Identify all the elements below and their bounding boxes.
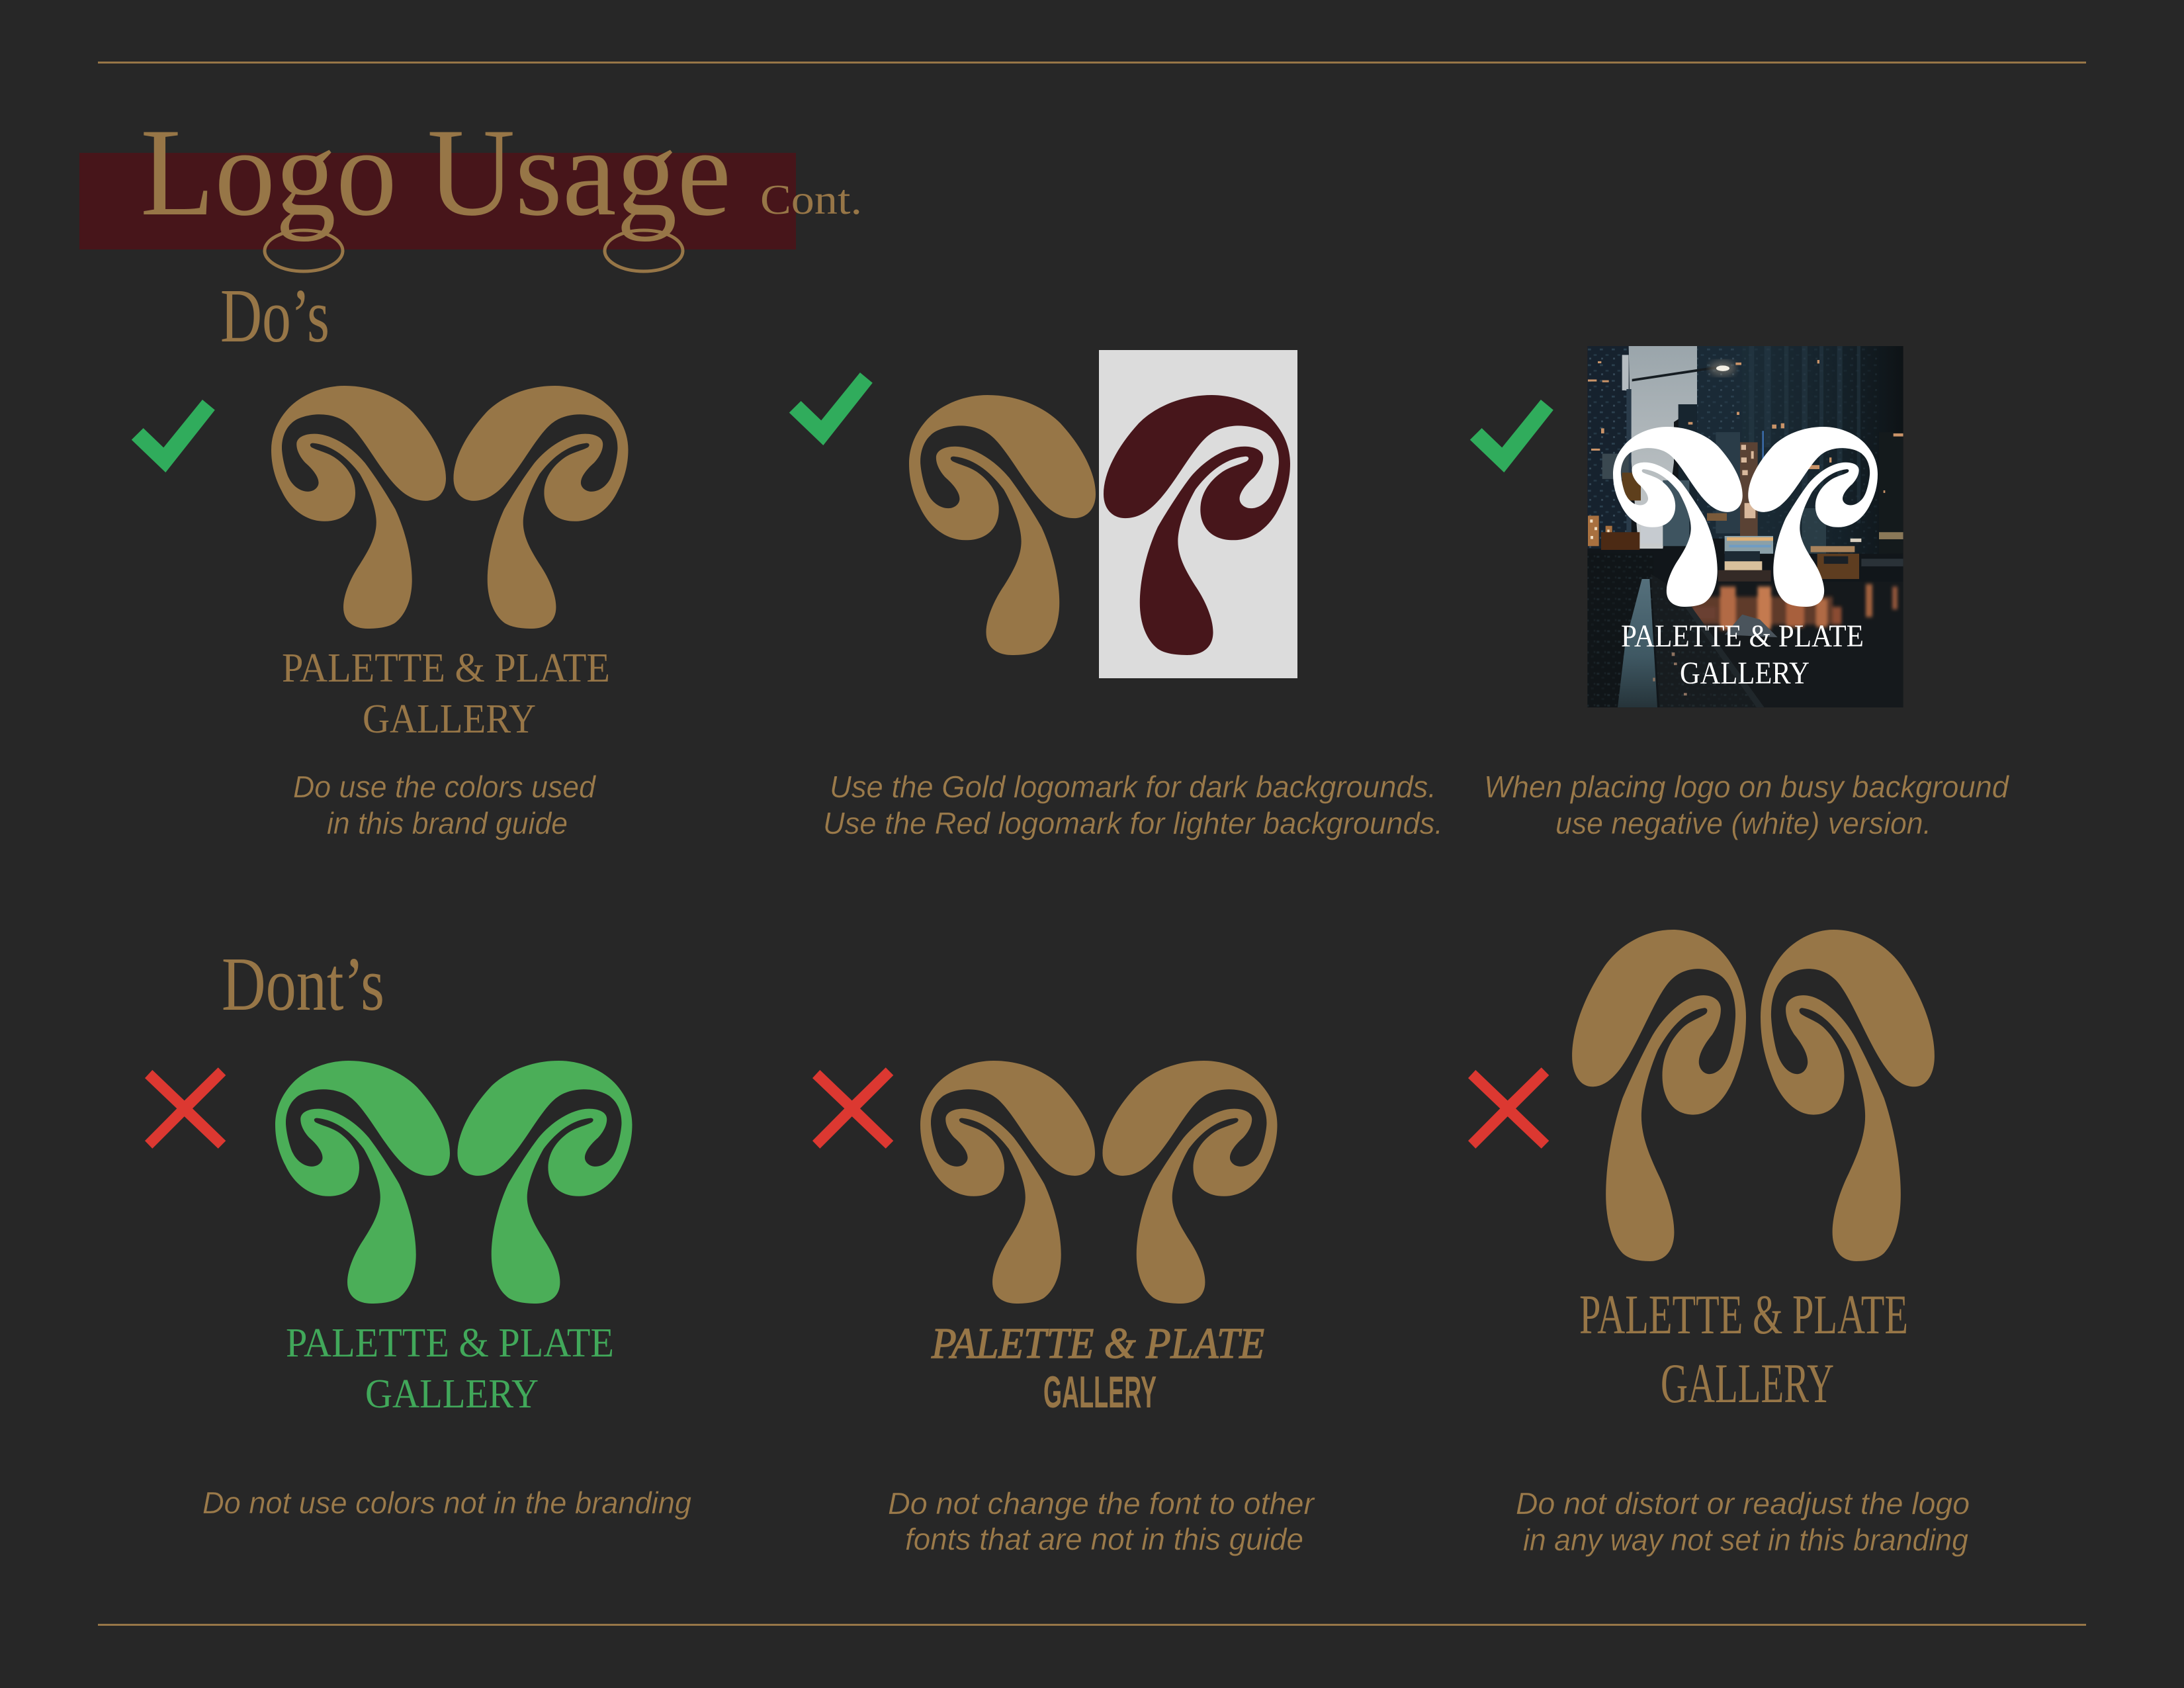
left side lights: [1588, 515, 1612, 546]
central car and traffic: [1725, 536, 1773, 554]
caption: in any way not set in this branding: [1523, 1523, 1968, 1557]
distorted wordmark: [1579, 1284, 1908, 1415]
caption: Do use the colors used: [293, 770, 596, 804]
wordmark green: GALLERY: [365, 1372, 539, 1417]
light grey swatch: [1099, 350, 1297, 678]
caption: fonts that are not in this guide: [905, 1522, 1303, 1556]
caption: [293, 770, 596, 840]
caption: [1484, 770, 2009, 840]
red half logomark: [1104, 395, 1290, 655]
panel: negative logo on busy background: [1470, 346, 2009, 840]
caption: When placing logo on busy background: [1484, 770, 2009, 804]
logomark green: [275, 1061, 632, 1304]
icon: check mark: [789, 373, 873, 445]
caption: [888, 1486, 1315, 1556]
city street photo: [1587, 346, 1903, 707]
wordmark: [282, 646, 610, 742]
wordmark green: PALETTE & PLATE: [286, 1321, 614, 1366]
panel: gold and red logomarks: [789, 350, 1443, 840]
wordmark green: [286, 1321, 614, 1417]
white logomark: [1613, 427, 1878, 607]
taxi on the right: [1817, 554, 1859, 579]
heading: Dont's: Dont’s: [222, 942, 384, 1026]
gold half logomark: [909, 395, 1096, 655]
distorted wordmark: PALETTE & PLATE: [1579, 1284, 1908, 1346]
panel: do not use off-brand colors: [145, 1061, 691, 1520]
wet sidewalk: [1618, 579, 1657, 707]
central lit tower: [1740, 442, 1758, 539]
icon: red cross: [145, 1067, 226, 1149]
lower road tone: [1685, 582, 1903, 707]
logomark gold: [920, 1061, 1277, 1304]
title highlight band: [79, 153, 796, 249]
top rule: [98, 62, 2086, 64]
wordmark: PALETTE & PLATE: [282, 646, 610, 691]
caption: Do not distort or readjust the logo: [1516, 1486, 1970, 1521]
caption: Do not change the font to other: [888, 1486, 1315, 1521]
heading: Do's: Do’s: [220, 274, 329, 358]
caption: in this brand guide: [327, 806, 568, 840]
caption: use negative (white) version.: [1555, 806, 1931, 840]
caption: [1516, 1486, 1970, 1557]
caption: Use the Red logomark for lighter backgrounds.: [823, 806, 1443, 840]
wordmark: GALLERY: [363, 697, 536, 742]
wordmark white: [1621, 619, 1864, 691]
caption: Use the Gold logomark for dark backgrounds.: [830, 770, 1436, 804]
wrong-font wordmark: [931, 1319, 1264, 1417]
wordmark white: GALLERY: [1680, 656, 1810, 691]
wrong-font wordmark: GALLERY: [1043, 1367, 1157, 1417]
icon: red cross: [812, 1067, 893, 1149]
icon: red cross: [1468, 1067, 1549, 1149]
distorted wordmark: GALLERY: [1661, 1353, 1834, 1415]
title block: [79, 103, 862, 271]
wordmark white: PALETTE & PLATE: [1621, 619, 1864, 654]
heading: Logo Usage: Logo Usage: [140, 103, 731, 242]
lit windows: [1588, 360, 1903, 493]
wrong-font wordmark: PALETTE & PLATE: [931, 1319, 1264, 1368]
caption: Do not use colors not in the branding: [202, 1486, 691, 1520]
icon: check mark: [132, 400, 215, 472]
bottom rule: [98, 1624, 2086, 1626]
heading suffix: Cont.: Cont.: [760, 176, 862, 223]
logomark gold: [271, 386, 628, 629]
caption: [823, 770, 1443, 840]
descender loop: first g: [265, 230, 343, 271]
road reflections: [1692, 584, 1898, 630]
panel: do not change the font: [812, 1061, 1315, 1556]
vertical building strips: [1749, 346, 1860, 523]
icon: check mark: [1470, 400, 1553, 472]
panel: do not distort the logo: [1468, 930, 1970, 1557]
panel: do use brand colors: [132, 386, 628, 840]
distorted logomark: [1572, 930, 1935, 1261]
descender loop: second g: [605, 230, 683, 271]
street lamp: [1632, 367, 1716, 382]
